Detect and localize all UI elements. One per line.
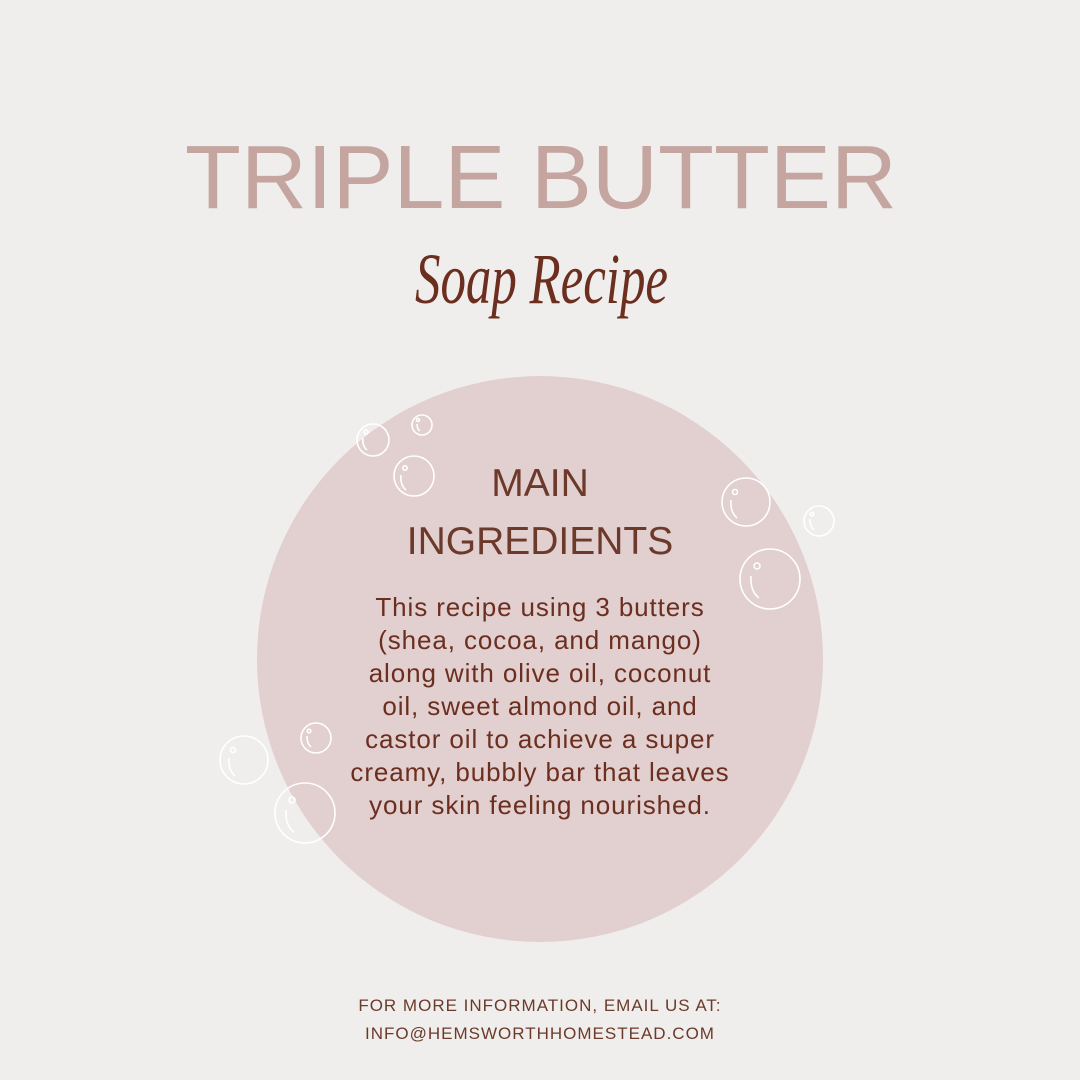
text block: description: This recipe using 3 butters (375, 592, 705, 622)
text block: description (350, 592, 730, 820)
text block: description: your skin feeling nourished. (369, 790, 711, 820)
text block: description: castor oil to achieve a super (365, 724, 715, 754)
panel: main ingredients circle (257, 376, 823, 942)
text block: description: creamy, bubbly bar that leaves (350, 757, 730, 787)
text block: description: oil, sweet almond oil, and (382, 691, 698, 721)
text block: description: along with olive oil, coconut (369, 658, 711, 688)
subtitle: Soap Recipe: Soap Recipe (415, 239, 668, 319)
heading: main ingredients: INGREDIENTS (407, 520, 673, 563)
footer: contact: INFO@HEMSWORTHHOMESTEAD.COM (365, 1024, 715, 1043)
heading: main ingredients (407, 462, 673, 563)
text block: description: (shea, cocoa, and mango) (378, 625, 702, 655)
footer: contact: FOR MORE INFORMATION, EMAIL US AT: (358, 996, 722, 1015)
heading: main ingredients: MAIN (491, 462, 589, 505)
footer: contact (358, 996, 722, 1043)
